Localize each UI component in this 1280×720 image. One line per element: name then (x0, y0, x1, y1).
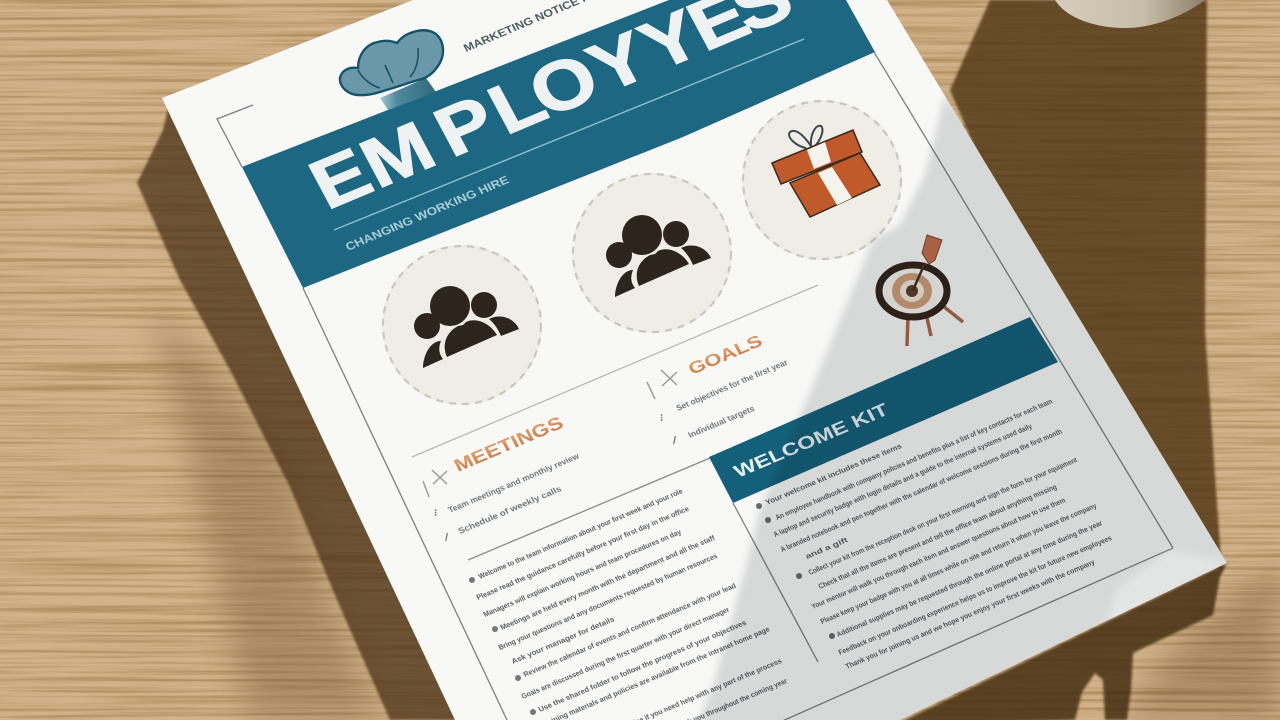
meetings list: Team meetings and monthly review (446, 451, 581, 515)
meetings list: / (445, 532, 448, 544)
goals list: / (673, 435, 676, 447)
body text: left column: Use the shared folder to follow the progress of your objectives (537, 618, 748, 714)
goals list: Individual targets (686, 403, 757, 440)
body text: welcome kit column: Please keep your badge with you at all times while on site and return it when you leave the company (819, 501, 1099, 626)
body text: welcome kit column: A laptop and security badge with login details and a guide to the internal systems used daily (772, 421, 1034, 539)
header band rule (334, 39, 804, 230)
goals list: Set objectives for the first year (674, 357, 790, 413)
meetings list: ⁝ (434, 508, 437, 519)
meetings marker (423, 470, 447, 497)
circle: gift icon (742, 100, 902, 260)
goals list: ⁝ (660, 413, 663, 424)
body text: welcome kit column: Thank you for joining us and we hope you enjoy your first weeks with the company (844, 557, 1097, 671)
heading: welcome kit: WELCOME KIT (730, 400, 892, 482)
body text: left column: Welcome to the team information about your first week and your role (477, 487, 684, 581)
welcome kit band (709, 317, 1058, 503)
heading: meetings: MEETINGS (450, 413, 567, 476)
meetings list: Schedule of weekly calls (456, 484, 563, 536)
lighting: bright streak near corner (1110, 548, 1219, 619)
lighting: shade across flyer (695, 95, 1280, 720)
body text: welcome kit column (756, 397, 1113, 671)
icon: target with dart (879, 235, 963, 346)
body text: welcome kit column: Collect your kit from the reception desk on your first morning and sign the form for your equipment (807, 455, 1079, 577)
flyer inner border lines (217, 52, 1173, 720)
meetings list (434, 451, 581, 544)
header band (242, 0, 875, 288)
body text: welcome kit column: and a gift (804, 535, 850, 561)
body text: left column: Review the calendar of events and confirm attendance with your lead (522, 581, 738, 679)
body text: left column: Goals are discussed during the first quarter with your direct manager (520, 605, 731, 701)
goals list (660, 357, 790, 447)
body text: left column: Meetings are held every month with the department and all the staff (499, 533, 717, 632)
section: goals (647, 331, 790, 447)
heading: goals: GOALS (685, 331, 766, 379)
circle: people icon two (572, 173, 732, 333)
body text: welcome kit column: An employee handbook with company policies and benefits plus a list of key contacts for each team (774, 397, 1054, 522)
coffee cup at top edge (1055, 0, 1205, 28)
body text: welcome kit column: A branded notebook and pen together with the calendar of welcome sessions during the first month (779, 427, 1064, 554)
goals marker (647, 370, 677, 399)
body text: welcome kit column: Check that all the items are present and tell the office team about anything missing (817, 482, 1059, 591)
body text: welcome kit column: Additional supplies may be requested through the online portal at any time during the year (835, 518, 1104, 639)
body text: welcome kit column: Your welcome kit includes these items (764, 442, 903, 507)
header band subtitle: CHANGING WORKING HIRE (344, 174, 512, 254)
body text: left column: Bring your questions and any documents requested by human resources (497, 551, 719, 652)
body text: welcome kit column: Feedback on your onboarding experience helps us to improve the kit for future new employees (837, 533, 1113, 657)
body text: welcome kit column: Your mentor will walk you through each item and answer questions about how to use them (810, 495, 1067, 611)
body text: left column (469, 487, 789, 720)
body text: left column: Managers will explain working hours and team procedures on day (482, 527, 684, 619)
section: meetings (423, 413, 581, 544)
circle: people icon one (382, 245, 542, 405)
icon: chef hat (340, 30, 443, 110)
body text: left column: Ask your manager for details (510, 615, 616, 666)
body text: left column: Please read the guidance carefully before your first day in the office (475, 504, 691, 602)
